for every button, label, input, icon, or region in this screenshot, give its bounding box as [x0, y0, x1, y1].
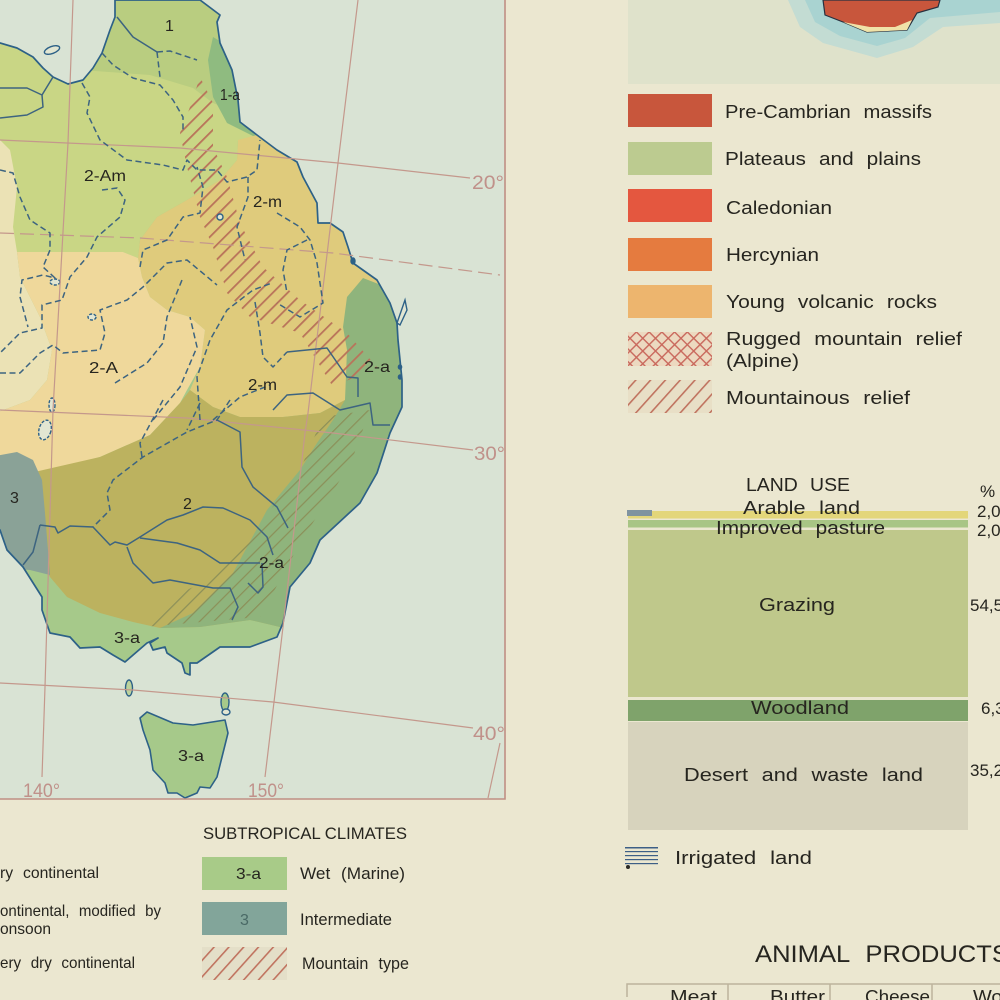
- zone 2-A: [0, 252, 205, 480]
- animal products heading: ANIMAL PRODUCTS: [755, 941, 1000, 968]
- coordinate labels: 150°: [248, 781, 284, 802]
- bottom legend: continental climates (cropped text): ontinental, modified by: [0, 903, 161, 920]
- Pre-Cambrian massifs: Pre-Cambrian massifs: [725, 102, 932, 122]
- animal products table header: [627, 984, 1000, 1000]
- climate zone labels: 2: [183, 496, 192, 513]
- bottom legend: subtropical climates: [202, 824, 409, 980]
- rivers: dashed and solid: [0, 17, 390, 620]
- land use labels: Woodland: [751, 698, 849, 718]
- Pre-Cambrian massifs: [628, 94, 932, 127]
- zone 2-a: [160, 278, 402, 628]
- Caledonian: Caledonian: [726, 198, 832, 218]
- map frame: [0, 0, 505, 799]
- land use labels: [684, 475, 923, 785]
- bottom legend: subtropical climates: Intermediate: [300, 910, 392, 929]
- irrigated marker: [627, 510, 652, 516]
- Hercynian: Hercynian: [726, 245, 819, 265]
- land use labels: Arable land: [743, 498, 860, 518]
- bottom legend: subtropical climates: SUBTROPICAL CLIMATES: [203, 824, 407, 843]
- desert bar: [628, 722, 968, 830]
- bottom legend: continental climates (cropped text): onsoon: [0, 921, 51, 938]
- coastline: [0, 0, 402, 675]
- coordinate labels: 140°: [23, 781, 60, 802]
- swatch 3-a: 3-a: [236, 866, 261, 883]
- climate zone labels: 3: [10, 490, 19, 507]
- grid lines: meridians and parallels: [0, 0, 500, 798]
- zone 2-Am: [0, 40, 260, 258]
- Mountainous relief: [628, 380, 911, 413]
- Caledonian: [628, 189, 832, 222]
- zone 1: [92, 1, 219, 104]
- climate zone labels: 2-a: [259, 555, 284, 572]
- climate zone labels: 3-a: [114, 630, 140, 647]
- small islands and lakes: [37, 44, 407, 715]
- coordinate labels: 40°: [473, 724, 505, 745]
- climate zone labels: 1-a: [220, 87, 240, 104]
- inset: coastal rim: [843, 20, 912, 32]
- climate zone labels: 1: [165, 18, 174, 35]
- land use percentages: [970, 482, 1000, 780]
- climate zone labels: 2-m: [253, 194, 282, 211]
- land use labels: Improved pasture: [716, 518, 885, 538]
- land use percentages: 2,0: [977, 521, 1000, 540]
- Mountainous relief: Mountainous relief: [726, 388, 911, 408]
- land use labels: Grazing: [759, 595, 835, 615]
- map: eastern Australia climate zones: [0, 0, 420, 700]
- hatch: southern mountain relief: [143, 410, 370, 627]
- zone 3 intermediate: [0, 452, 50, 575]
- woodland bar: [628, 700, 968, 721]
- land use labels: Desert and waste land: [684, 765, 923, 785]
- zone pale continental: [0, 130, 52, 415]
- Hercynian: [628, 238, 819, 271]
- irrigated land legend: Irrigated land: [675, 848, 812, 868]
- Plateaus and plains: [628, 142, 921, 175]
- Tasmania: [140, 712, 228, 798]
- inset map panel: [628, 0, 1000, 84]
- inset: inner halo: [805, 0, 1000, 46]
- icon: irrigation lines: [625, 847, 658, 869]
- Rugged mountain relief: Rugged mountain relief: [726, 329, 963, 349]
- climate zone labels: 2-a: [364, 359, 390, 376]
- Young volcanic rocks: [628, 285, 937, 318]
- bottom legend: continental climates (cropped text): [0, 865, 161, 972]
- zone 3-a wet marine: [0, 141, 345, 674]
- inset: sea halo: [788, 0, 1000, 58]
- zone 2-m: [138, 135, 378, 417]
- bottom legend: subtropical climates: Wet (Marine): [300, 864, 405, 883]
- hatch: northern mountain relief: [180, 77, 377, 387]
- bottom legend: continental climates (cropped text): ery dry continental: [0, 955, 135, 972]
- land use percentages: 2,0: [977, 502, 1000, 521]
- improved pasture bar: [628, 520, 968, 528]
- map sea background: [0, 0, 505, 799]
- swatch 3: [202, 902, 287, 935]
- climate zone labels: 2-A: [89, 360, 118, 377]
- irrigated land legend: [625, 847, 812, 869]
- coordinate labels: [23, 173, 505, 802]
- bottom legend: continental climates (cropped text): ry continental: [0, 865, 99, 882]
- grazing bar: [628, 530, 968, 697]
- Rugged mountain relief: [628, 329, 963, 371]
- arable bar: [628, 511, 968, 518]
- Young volcanic rocks: Young volcanic rocks: [726, 292, 937, 312]
- geology legend: [628, 94, 963, 413]
- swatch mountain type: [202, 947, 287, 980]
- zone 1-a: [208, 37, 257, 138]
- zone 2 olive: [30, 390, 345, 628]
- land use percentages: %: [980, 482, 995, 501]
- swatch 3-a: [202, 857, 287, 890]
- climate zone labels: 2-Am: [84, 168, 126, 185]
- climate zone labels: [10, 18, 390, 765]
- land use labels: LAND USE: [746, 475, 850, 495]
- climate zone labels: 2-m: [248, 377, 277, 394]
- land use chart: [627, 475, 1000, 830]
- Plateaus and plains: Plateaus and plains: [725, 149, 921, 169]
- inset: landmass: [823, 0, 940, 32]
- coordinate labels: 30°: [474, 444, 505, 465]
- Rugged mountain relief: (Alpine): [726, 351, 799, 371]
- climate zone labels: 3-a: [178, 748, 204, 765]
- coordinate labels: 20°: [472, 173, 504, 194]
- swatch 3: 3: [240, 912, 249, 929]
- bottom legend: subtropical climates: Mountain type: [302, 954, 409, 973]
